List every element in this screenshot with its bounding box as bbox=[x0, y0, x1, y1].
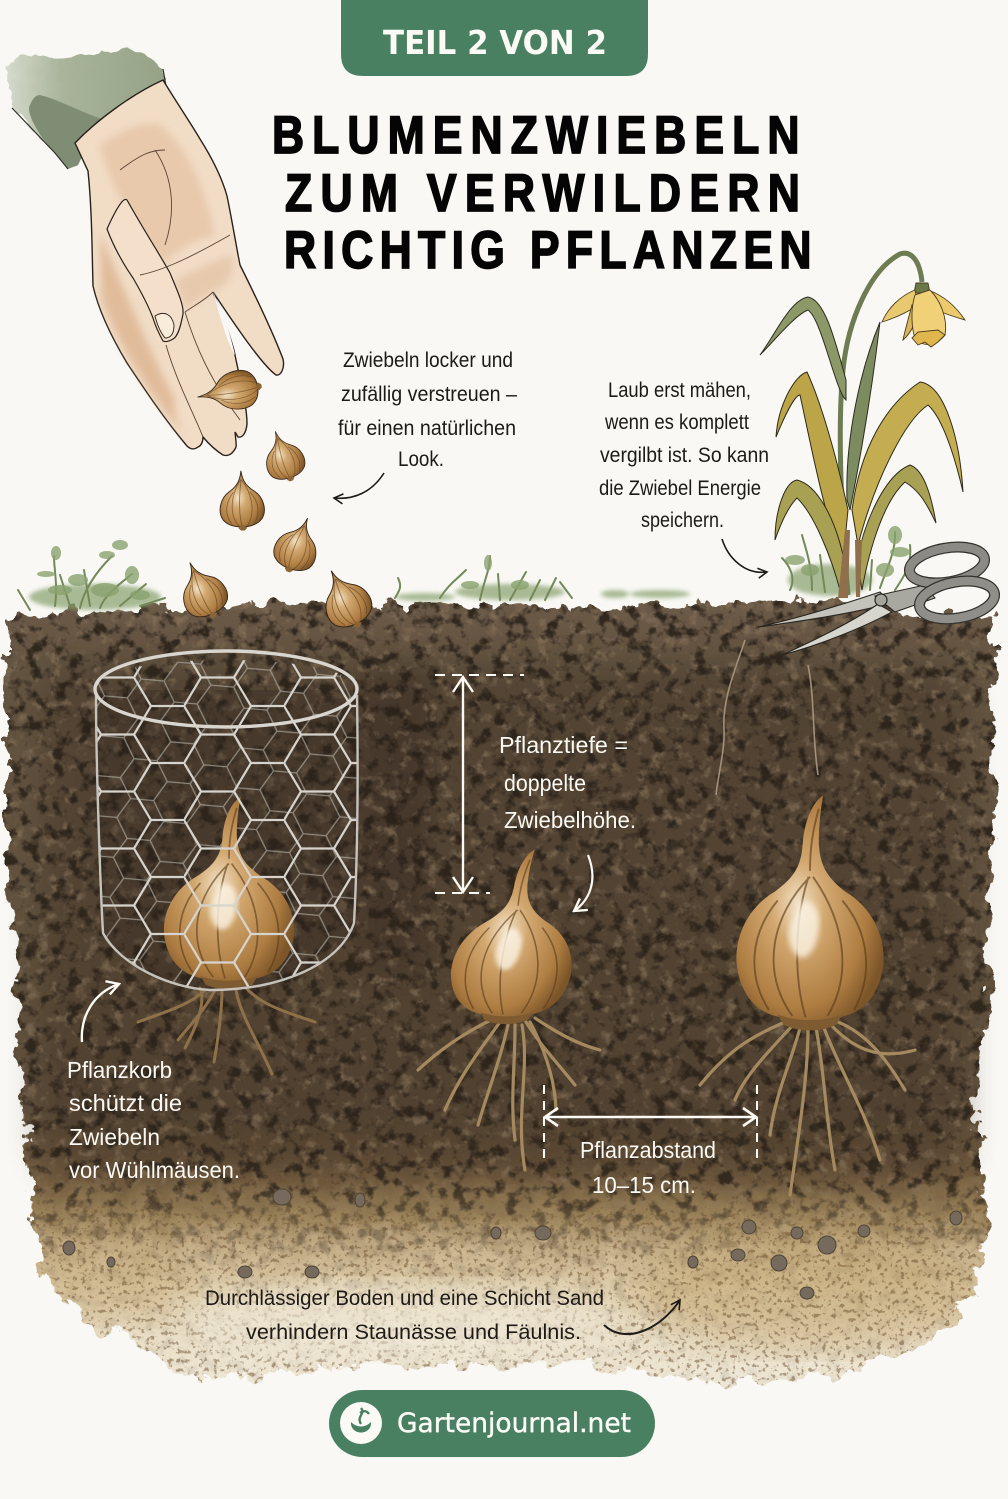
text block: basket protects bulbs: schützt die bbox=[69, 1090, 182, 1116]
text block: planting distance: Pflanzabstand bbox=[580, 1137, 716, 1163]
title: BLUMENZWIEBELN bbox=[272, 106, 800, 165]
falling onion bulbs bbox=[170, 367, 379, 637]
front mesh bbox=[97, 660, 356, 986]
logo icon bbox=[340, 1402, 382, 1444]
label badge: part 2 of 2 bbox=[341, 0, 648, 76]
leaves bbox=[760, 297, 846, 400]
footer badge: Gartenjournal.net bbox=[329, 1390, 655, 1457]
basket rim bbox=[95, 651, 357, 727]
pebbles in the sand layer bbox=[63, 1189, 962, 1299]
text block: scatter loosely: für einen natürlichen bbox=[338, 417, 516, 440]
stem bbox=[840, 253, 922, 595]
arrow: to daffodil foliage bbox=[722, 539, 767, 572]
panel: soil cross-section bbox=[0, 570, 1008, 1400]
text block: drainage bbox=[205, 1287, 604, 1344]
scissors bbox=[758, 542, 998, 655]
text block: planting depth: Zwiebelhöhe. bbox=[504, 807, 636, 833]
label badge: part 2 of 2: TEIL 2 VON 2 bbox=[383, 23, 607, 62]
text block: basket protects bulbs bbox=[67, 1057, 240, 1183]
text block: basket protects bulbs: vor Wühlmäusen. bbox=[69, 1157, 240, 1183]
text block: scatter loosely bbox=[338, 349, 517, 471]
arrow: to falling bulbs bbox=[334, 473, 384, 498]
text block: scatter loosely: Look. bbox=[398, 448, 444, 471]
roots below basket bbox=[138, 988, 315, 1074]
text block: planting depth: Pflanztiefe = bbox=[499, 732, 628, 758]
title: ZUM VERWILDERN bbox=[285, 164, 800, 223]
text block: mow foliage later: vergilbt ist. So kann bbox=[600, 444, 769, 467]
text block: basket protects bulbs: Zwiebeln bbox=[69, 1124, 160, 1150]
palm and fingers bbox=[75, 80, 284, 455]
text block: planting distance: 10–15 cm. bbox=[592, 1172, 696, 1198]
text block: mow foliage later: speichern. bbox=[641, 509, 724, 532]
basket outline bbox=[96, 695, 358, 990]
title bbox=[272, 106, 812, 280]
grass tufts along the soil surface bbox=[18, 526, 910, 610]
white arrow: to middle bulb bbox=[574, 855, 592, 911]
gap between index and middle finger bbox=[213, 292, 235, 355]
text block: scatter loosely: Zwiebeln locker und bbox=[343, 349, 513, 372]
spacing marker bbox=[544, 1085, 757, 1162]
planting depth marker bbox=[435, 675, 524, 893]
flower bbox=[882, 283, 965, 347]
arrow: to sand layer bbox=[604, 1300, 680, 1334]
title: RICHTIG PFLANZEN bbox=[284, 221, 812, 280]
white arrow: to basket bbox=[82, 984, 119, 1042]
footer badge: Gartenjournal.net: Gartenjournal.net bbox=[397, 1408, 631, 1439]
text block: mow foliage later bbox=[599, 379, 769, 532]
text block: basket protects bulbs: Pflanzkorb bbox=[67, 1057, 172, 1083]
daffodil plant bbox=[760, 253, 965, 598]
bulb in basket bbox=[164, 797, 294, 989]
text block: planting depth: doppelte bbox=[504, 770, 586, 796]
hand scattering bulbs bbox=[5, 50, 284, 455]
text block: mow foliage later: die Zwiebel Energie bbox=[599, 477, 761, 500]
wire basket with bulb bbox=[90, 648, 365, 1074]
thumb bbox=[107, 199, 183, 342]
sleeve bbox=[5, 50, 167, 169]
text block: drainage: verhindern Staunässe und Fäulnis. bbox=[246, 1321, 581, 1344]
back mesh bbox=[97, 660, 356, 989]
text block: mow foliage later: wenn es komplett bbox=[604, 411, 749, 434]
text block: planting depth bbox=[499, 732, 636, 833]
text block: scatter loosely: zufällig verstreuen – bbox=[341, 383, 517, 406]
text block: planting distance bbox=[580, 1137, 716, 1198]
text block: mow foliage later: Laub erst mähen, bbox=[608, 379, 751, 402]
middle bulb with roots bbox=[418, 850, 600, 1170]
text block: drainage: Durchlässiger Boden und eine Schicht Sand bbox=[205, 1287, 604, 1310]
thin surface roots under the plant bbox=[716, 640, 818, 795]
right bulb with roots bbox=[700, 795, 915, 1195]
